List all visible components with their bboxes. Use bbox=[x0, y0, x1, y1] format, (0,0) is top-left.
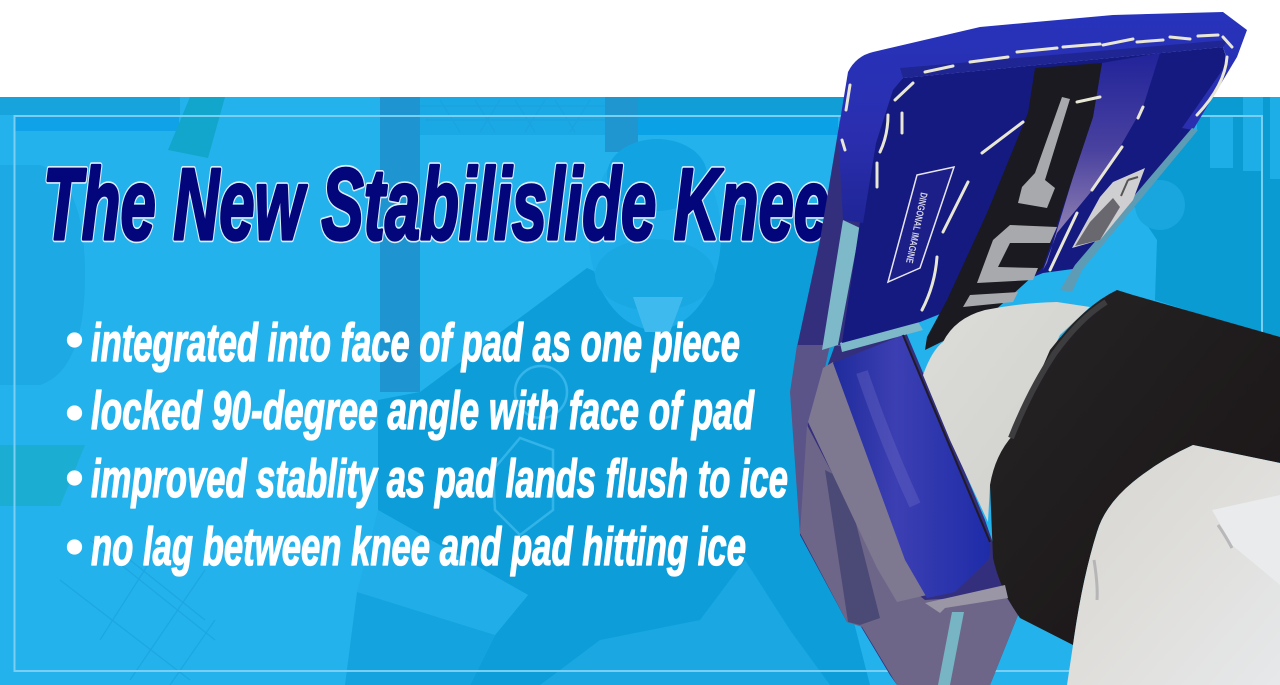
silver logo marks on strap bbox=[963, 97, 1070, 307]
bullet 4 bbox=[68, 517, 746, 577]
back panel of pad bbox=[842, 47, 1228, 343]
goalie jersey bbox=[378, 205, 870, 685]
bullet 3 bbox=[68, 449, 788, 509]
knee block bbox=[833, 335, 990, 598]
bullet 2 bbox=[68, 381, 755, 441]
bullet 3: improved stablity as pad lands flush to ice bbox=[91, 449, 788, 509]
bottom gray strap bbox=[925, 585, 1008, 613]
title: The New Stabilislide Knee bbox=[43, 149, 829, 261]
bullet 4: no lag between knee and pad hitting ice bbox=[91, 517, 746, 577]
black leg strap bbox=[990, 290, 1280, 645]
goalie mask bbox=[589, 140, 721, 330]
gray panel beside knee bbox=[808, 362, 927, 602]
goalie pad photo bbox=[790, 12, 1280, 685]
teal trim bbox=[822, 220, 860, 350]
white under-leg bbox=[923, 302, 1090, 522]
sock fold bbox=[1094, 495, 1280, 600]
bullet 1 bbox=[68, 313, 740, 373]
team crest bbox=[515, 366, 567, 418]
blue outer rim bbox=[838, 12, 1247, 223]
white stitching bbox=[842, 35, 1232, 310]
white sock bbox=[1067, 445, 1280, 685]
right side backdrop bbox=[1130, 97, 1280, 340]
size label bbox=[1072, 168, 1145, 248]
name tag: DINGONAL IMAGINE bbox=[903, 191, 929, 264]
bullet list bbox=[68, 313, 788, 577]
left logo and green board bbox=[0, 165, 85, 385]
black strap bbox=[925, 63, 1102, 350]
pad side and lower body bbox=[790, 120, 1018, 685]
goal posts bbox=[380, 97, 420, 392]
bullet 2: locked 90-degree angle with face of pad bbox=[91, 381, 755, 441]
bullet 1: integrated into face of pad as one piece bbox=[91, 313, 740, 373]
net strands bbox=[60, 100, 605, 685]
name tag bbox=[888, 167, 954, 282]
decorative frame bbox=[14, 116, 1262, 671]
title: The New Stabilislide Knee bbox=[43, 149, 829, 261]
teal side edge bbox=[1060, 128, 1198, 292]
title bbox=[43, 149, 829, 261]
purple gradient section bbox=[1043, 53, 1160, 270]
